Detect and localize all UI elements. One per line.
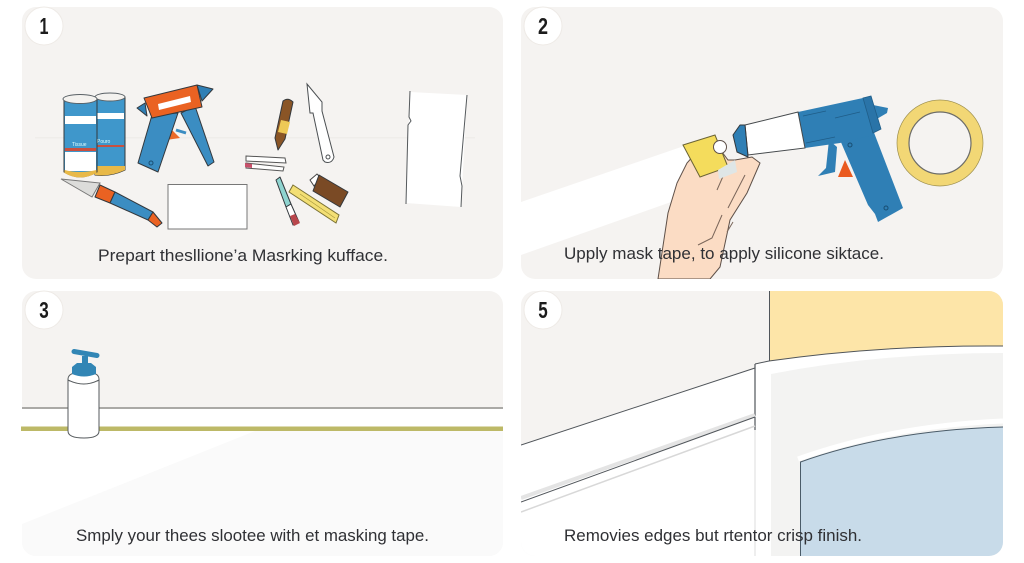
- badge: step 5: [524, 291, 562, 329]
- icon: brown crayon: [275, 99, 293, 150]
- icon: teal marker: [276, 177, 300, 226]
- icon: utility knife: [61, 179, 162, 227]
- roofline strokes: [521, 291, 1003, 556]
- badge: step 2: 2: [538, 13, 548, 39]
- icon: brown bottle: [310, 174, 348, 207]
- lower surface: [22, 408, 503, 556]
- white trim and floor: [521, 346, 1003, 556]
- icon: pump bottle: [68, 352, 99, 438]
- panel: step 2 apply tape: [521, 7, 1003, 279]
- icon: caulking gun orange: [137, 85, 214, 172]
- white tape strip: [521, 146, 705, 255]
- badge: step 1: 1: [40, 13, 49, 39]
- icon: yellow ruler: [289, 185, 339, 223]
- grey door panel: [771, 353, 1003, 556]
- badge: step 2: [524, 7, 562, 45]
- badge: step 3: [25, 291, 63, 329]
- icon: silicone tubes: Tissue: [72, 142, 87, 148]
- wall line: [22, 407, 503, 409]
- badge: step 3: 3: [39, 297, 49, 323]
- masking tape line: [21, 426, 503, 431]
- badge: step 1: [25, 7, 63, 45]
- icon: silicone tubes: Pouro: [97, 139, 111, 145]
- caption: step 3: Smply your thees slootee with et masking tape.: [76, 527, 429, 545]
- panel: step 1 prepare materials: [22, 7, 503, 279]
- icon: small pens: [245, 156, 286, 171]
- icon: masking tape roll: [897, 100, 983, 186]
- icon: paper sheet: [406, 91, 467, 207]
- yellow wall: [769, 291, 1003, 361]
- panel: step 4 remove tape finish: [521, 291, 1003, 556]
- icon: yellow masking tab: [683, 135, 737, 179]
- icon: caulking gun blue: [733, 96, 903, 222]
- icon: silicone tubes: [63, 93, 125, 178]
- caption: step 2: Upply mask tape, to apply silicone siktace.: [564, 245, 884, 263]
- blue window: [798, 421, 1003, 556]
- caption: step 4: Removies edges but rtentor crisp finish.: [564, 527, 862, 545]
- badge: step 5: 5: [538, 297, 548, 323]
- icon: scraper knife: [307, 84, 334, 162]
- icon: white card: [168, 184, 247, 229]
- panel: step 3 mask along the wall: [21, 291, 503, 556]
- caption: step 1: Prepart thesllione’a Masrking kufface.: [98, 247, 388, 265]
- icon: hand: [658, 144, 760, 279]
